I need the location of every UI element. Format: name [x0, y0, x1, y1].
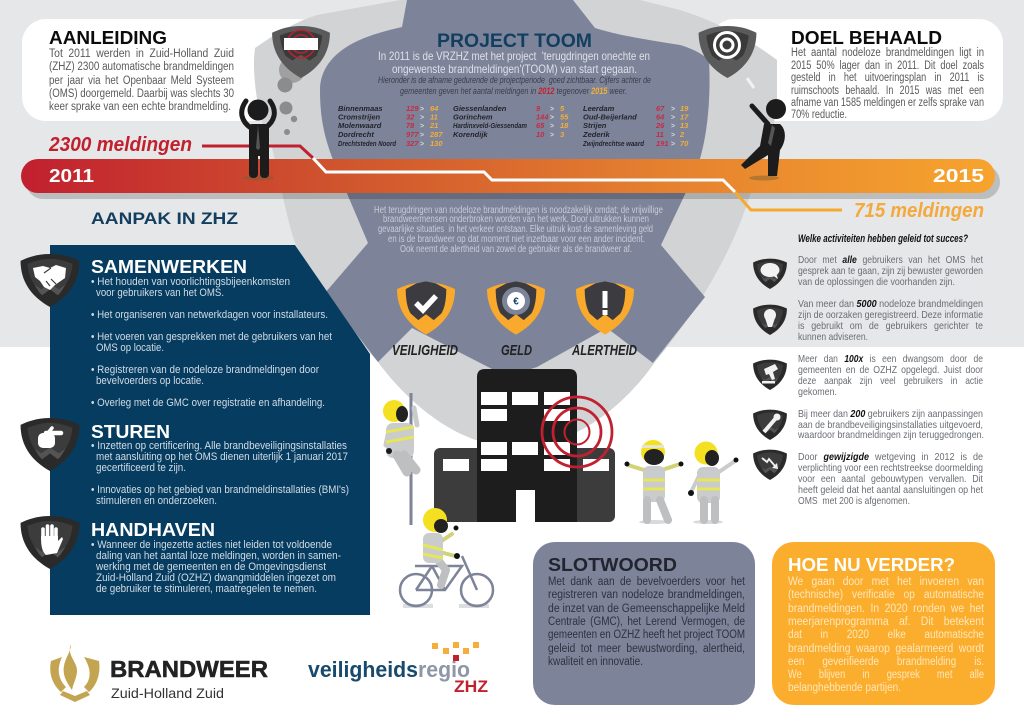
- text block: activiteit 5: voor een aantal gebouwtypen vervallen. Dit: [798, 473, 983, 485]
- timeline connector line: [202, 146, 842, 210]
- panel: hoe nu verder: We blijven in gesprek met alle: [788, 669, 984, 681]
- panel: slotwoord: de inzet van de Gemeenschappelijke Meld: [548, 603, 745, 615]
- table: meldingen per gemeente: 191: [656, 139, 669, 148]
- table: meldingen per gemeente: 18: [560, 121, 569, 130]
- table: meldingen per gemeente: 67: [656, 104, 665, 113]
- table: meldingen per gemeente: 9: [536, 104, 541, 113]
- icon: handshake shield: [21, 254, 79, 307]
- text block: waarom noodzakelijk: gevaarlijke situaties in het verkeer ontstaan. Elke uitruk kost de samenleving geld: [378, 224, 653, 235]
- table: meldingen per gemeente: 26: [655, 121, 665, 130]
- text block: samenwerken: • Overleg met de GMC over registratie en afhandeling.: [91, 397, 325, 409]
- illustration: firefighter waving: [688, 442, 738, 524]
- table: meldingen per gemeente: >: [671, 114, 675, 122]
- text block: activiteit 2: Van meer dan 5000 nodeloze brandmeldingen: [798, 298, 983, 310]
- table: meldingen per gemeente: 144: [536, 112, 549, 122]
- text block: activiteit 1: [798, 254, 983, 288]
- text block: activiteit 2: [798, 298, 983, 343]
- table: meldingen per gemeente: 10: [536, 130, 545, 139]
- text block: activiteit 2: is gebruikt om de gebruikers gerichter te: [798, 320, 983, 332]
- table: meldingen per gemeente: Leerdam: [583, 104, 615, 113]
- logo: brandweer zuid-holland zuid: Zuid-Holland Zuid: [111, 685, 224, 701]
- text block: handhaven: • Wanneer de ingezette acties niet leiden tot voldoende: [91, 539, 332, 551]
- label: geld: GELD: [501, 342, 532, 359]
- table: meldingen per gemeente: [338, 104, 689, 148]
- timeline bar: 2015: [933, 165, 984, 186]
- text block: waarom noodzakelijk: Het terugdringen van nodeloze brandmeldingen is noodzakelijk omdat; de vrijwillige: [374, 205, 663, 216]
- table: meldingen per gemeente: Cromstrijen: [338, 112, 381, 122]
- heading: aanpak in zhz: AANPAK IN ZHZ: [91, 209, 238, 228]
- timeline bar: [21, 159, 1000, 199]
- table: meldingen per gemeente: >: [420, 114, 424, 122]
- table: meldingen per gemeente: 130: [430, 139, 443, 148]
- text block: activiteit 4: waardoor brandmeldingen zijn teruggedrongen.: [797, 429, 984, 441]
- table: meldingen per gemeente: 13: [680, 121, 689, 130]
- card: aanleiding background: [22, 19, 322, 121]
- text block: samenwerken: • Het houden van voorlichtingsbijeenkomsten: [91, 276, 290, 288]
- text block: activiteit 5: verplichting voor een rechtstreekse doormelding: [798, 462, 983, 474]
- icon: pointing hand shield: [21, 418, 79, 471]
- table: meldingen per gemeente: 287: [429, 130, 443, 139]
- panel: slotwoord: geleid tot meer bewustwording, alertheid,: [548, 643, 745, 655]
- panel: hoe nu verder: HOE NU VERDER?: [788, 554, 955, 575]
- text block: activiteit 4: aan de brandbeveiligingsinstallaties uitgevoerd,: [798, 419, 983, 431]
- heading: 2300 meldingen: 2300 meldingen: [48, 134, 192, 156]
- table: meldingen per gemeente: 78: [406, 121, 415, 130]
- text block: aanleiding: AANLEIDING: [49, 27, 167, 48]
- text block: doel behaald: 70% reductie.: [791, 109, 847, 121]
- text block: doel behaald: Het aantal nodeloze brandmeldingen ligt in: [791, 47, 984, 59]
- panel: hoe nu verder: meerjarenprogramma af. Dit betekent: [788, 616, 985, 628]
- table: meldingen per gemeente: Strijen: [583, 121, 607, 130]
- logo: brandweer zuid-holland zuid: [50, 644, 268, 702]
- text block: activiteit 4: Bij meer dan 200 gebruikers zijn aanpassingen: [798, 408, 983, 420]
- text block: activiteit 1: van de oplossingen die voorhanden zijn.: [798, 276, 955, 288]
- panel: aanpak: [50, 245, 370, 615]
- text block: doel behaald: [791, 27, 984, 121]
- text block: activiteit 5: OMS met 200 is afgenomen.: [798, 495, 910, 507]
- text block: sturen: • Inzetten op certificering. Alle brandbeveiligingsinstallaties: [91, 440, 347, 452]
- text block: handhaven: Zuid-Holland Zuid (OZHZ) dwangmiddelen ingezet om: [96, 572, 336, 584]
- text block: waarom noodzakelijk: Ook neemt de alertheid van zowel de gebruiker als de brandweer af.: [400, 244, 632, 255]
- text block: aanleiding: keer sprake van een echte brandmelding.: [49, 101, 231, 113]
- panel: hoe nu verder: brandmelding waarop gealarmeerd wordt: [788, 643, 985, 655]
- table: meldingen per gemeente: 11: [430, 112, 438, 122]
- table: meldingen per gemeente: >: [420, 132, 424, 139]
- text block: activiteit 3: gekomen.: [798, 386, 837, 398]
- illustration: target shield: [699, 26, 756, 88]
- panel: slotwoord: gemeenten en OZHZ heeft het project TOOM: [548, 629, 745, 641]
- table: meldingen per gemeente: 55: [560, 112, 569, 122]
- illustration: worried person 2011: [242, 100, 274, 180]
- timeline bar: 2011: [49, 165, 94, 186]
- text block: handhaven: daling van het aantal loze meldingen, worden in samen-: [96, 550, 341, 562]
- panel: hoe nu verder: dat in 2020 elke automatische: [788, 629, 984, 641]
- table: meldingen per gemeente: >: [550, 123, 554, 130]
- illustration: cheering person 2015: [741, 99, 786, 180]
- text block: samenwerken: [91, 257, 332, 409]
- heading: 715 meldingen: 715 meldingen: [854, 200, 984, 222]
- table: meldingen per gemeente: >: [671, 123, 675, 130]
- table: meldingen per gemeente: 977: [406, 130, 419, 139]
- text block: activiteit 3: gemeenten en de OZHZ opgelegd. Juist door: [798, 364, 983, 376]
- logo: brandweer zuid-holland zuid: BRANDWEER: [110, 656, 268, 682]
- table: meldingen per gemeente: 64: [430, 104, 439, 113]
- text block: handhaven: de gebruiker te stimuleren, maatregelen te nemen.: [96, 583, 317, 595]
- text block: activiteit 2: zijn de oorzaken geregistreerd. Deze informatie: [798, 309, 983, 321]
- table: meldingen per gemeente: Korendijk: [453, 130, 488, 139]
- icon: veiligheid shield: [397, 281, 455, 335]
- text block: aanleiding: per jaar via het Openbaar Meld Systeem: [49, 75, 234, 87]
- panel: hoe nu verder: belanghebbende partijen.: [788, 682, 901, 694]
- table: meldingen per gemeente: 17: [680, 112, 689, 122]
- table: meldingen per gemeente: 21: [429, 121, 438, 130]
- central blue-grey shape: [320, 0, 710, 372]
- table: meldingen per gemeente: >: [671, 141, 675, 148]
- logo: veiligheidsregio zhz: [308, 642, 488, 696]
- table: meldingen per gemeente: 65: [536, 121, 545, 130]
- text block: activiteit 3: [798, 353, 983, 398]
- table: meldingen per gemeente: Oud-Beijerland: [583, 112, 637, 122]
- table: meldingen per gemeente: Gorinchem: [453, 112, 493, 122]
- text block: samenwerken: bevelvoerders op locatie.: [96, 375, 204, 387]
- grey rays from shields to building: [378, 328, 653, 447]
- table: meldingen per gemeente: 32: [406, 112, 415, 122]
- icon: light bulb shield: [753, 305, 787, 335]
- text block: waarom noodzakelijk: en is de brandweer op dat moment niet inzetbaar voor een ander incident.: [388, 234, 645, 245]
- background: upper grey band: [0, 0, 1024, 347]
- label: veiligheid: VEILIGHEID: [392, 342, 458, 359]
- text block: handhaven: werking met de gemeenten en de Omgevingsdienst: [95, 561, 326, 573]
- text block: activiteit 3: deze aanpak zijn veel gebruikers in actie: [798, 375, 983, 387]
- icon: gavel shield: [753, 360, 787, 390]
- table: meldingen per gemeente: >: [671, 106, 675, 113]
- table: meldingen per gemeente: Zwijndrechtse waard: [582, 139, 644, 148]
- panel: hoe nu verder: (technische) verificatie op automatische: [788, 589, 984, 601]
- illustration: building with alarm rings: [434, 369, 615, 522]
- table: meldingen per gemeente: 2: [679, 130, 685, 139]
- text block: activiteit 1: gesprek aan te gaan, zijn zij bewuster geworden: [798, 265, 983, 277]
- table: meldingen per gemeente: >: [420, 106, 424, 113]
- panel: hoe nu verder: We gaan door met het invoeren van: [788, 576, 984, 588]
- table: meldingen per gemeente: 19: [680, 104, 689, 113]
- text block: activiteit 5: heeft geleid dat het aantal aansluitingen op het: [798, 484, 983, 496]
- icon: geld shield: [487, 281, 545, 335]
- text block: handhaven: [91, 520, 341, 595]
- text block: handhaven: HANDHAVEN: [91, 520, 215, 540]
- table: meldingen per gemeente: 3: [560, 130, 565, 139]
- text block: aanleiding: (OMS) doorgemeld. Daarbij was slechts 30: [49, 88, 234, 100]
- text block: aanleiding: [49, 27, 234, 113]
- table: meldingen per gemeente: Giessenlanden: [453, 104, 507, 113]
- panel: slotwoord: SLOTWOORD: [548, 554, 677, 575]
- table: meldingen per gemeente: Hardinxveld-Giessendam: [453, 121, 527, 130]
- illustration: thought shield and bubbles: [272, 26, 330, 135]
- table: meldingen per gemeente: 5: [560, 104, 565, 113]
- table: meldingen per gemeente: 129: [406, 104, 419, 113]
- text block: samenwerken: • Het organiseren van netwerkdagen voor installateurs.: [91, 309, 328, 321]
- table: meldingen per gemeente: Drechtsteden Noord: [338, 139, 396, 148]
- text block: activiteit 5: Door gewijzigde wetgeving in 2012 is de: [798, 451, 983, 463]
- table: meldingen per gemeente: >: [550, 114, 554, 122]
- central grey shield shape: [254, 0, 777, 447]
- panel: slotwoord: [533, 542, 755, 705]
- icon: stop hand shield: [21, 516, 79, 569]
- logo: veiligheidsregio zhz: ZHZ: [454, 677, 488, 696]
- table: meldingen per gemeente: Zederik: [582, 130, 611, 139]
- table: meldingen per gemeente: Binnenmaas: [338, 104, 383, 113]
- text block: waarom noodzakelijk: brandweermensen onderbroken worden van het werk. Door uitrukken kunnen: [383, 214, 649, 225]
- panel: hoe nu verder: [772, 542, 995, 705]
- panel: hoe nu verder: brandmeldingen. In 2020 ronden we het: [788, 603, 985, 615]
- text block: sturen: STUREN: [91, 422, 170, 442]
- text block: samenwerken: SAMENWERKEN: [91, 257, 247, 277]
- table: meldingen per gemeente: 64: [656, 112, 665, 122]
- text block: sturen: • Innovaties op het gebied van brandmeldinstallaties (BMI's): [91, 484, 349, 496]
- text block: activiteit 2: kunnen adviseren.: [798, 331, 868, 343]
- text block: aanleiding: (ZHZ) 2300 automatische brandmeldingen: [49, 61, 234, 73]
- text block: project toom: [378, 30, 651, 97]
- panel: slotwoord: Centrale (GMC), het Lerend Vermogen, de: [548, 616, 745, 628]
- panel: slotwoord: kwaliteit en innovatie.: [548, 656, 643, 668]
- text block: samenwerken: • Het voeren van gesprekken met de gebruikers van het: [91, 331, 332, 343]
- illustration: firefighter on bicycle: [400, 508, 493, 608]
- text block: sturen: gecertificeerd te zijn.: [96, 462, 186, 474]
- panel: slotwoord: Met dank aan de bevelvoerders voor het: [548, 576, 746, 588]
- text block: waarom noodzakelijk: [374, 205, 663, 255]
- illustration: firefighter on pole: [383, 393, 417, 525]
- table: meldingen per gemeente: >: [550, 132, 554, 139]
- text block: aanleiding: Tot 2011 werden in Zuid-Holland Zuid: [49, 48, 234, 60]
- text block: project toom: PROJECT TOOM: [437, 30, 592, 52]
- panel: slotwoord: registreren van nodeloze brandmeldingen,: [548, 589, 745, 601]
- table: meldingen per gemeente: 327: [406, 139, 419, 148]
- text block: activiteit 4: [797, 408, 984, 441]
- text block: project toom: In 2011 is de VRZHZ met het project 'terugdringen onechte en: [378, 49, 650, 63]
- logo: veiligheidsregio zhz: veiligheidsregio: [308, 657, 470, 682]
- table: meldingen per gemeente: >: [550, 106, 554, 113]
- text block: samenwerken: OMS op locatie.: [96, 342, 164, 354]
- icon: speech bubble shield: [753, 259, 787, 289]
- text block: sturen: met aansluiting op het OMS dienen uiterlijk 1 januari 2017: [96, 451, 348, 463]
- illustration: firefighter with raised arms: [624, 440, 684, 524]
- text block: sturen: [91, 422, 349, 507]
- icon: alertheid shield: [576, 281, 634, 335]
- icon: falling arrow shield: [753, 450, 787, 480]
- table: meldingen per gemeente: Molenwaard: [338, 121, 382, 130]
- text block: project toom: Hieronder is de afname gedurende de projectperiode goed zichtbaar. Cijfers achter de: [378, 75, 651, 86]
- text block: activiteit 1: Door met alle gebruikers van het OMS het: [798, 254, 983, 266]
- table: meldingen per gemeente: >: [420, 141, 424, 148]
- text block: sturen: stimuleren en onderzoeken.: [96, 495, 217, 507]
- table: meldingen per gemeente: >: [671, 132, 675, 139]
- icon: wrench shield: [753, 410, 787, 440]
- card: doel behaald background: [710, 19, 1003, 121]
- table: meldingen per gemeente: 11: [656, 130, 664, 139]
- text block: samenwerken: • Registreren van de nodeloze brandmeldingen door: [91, 364, 319, 376]
- icon: geld shield: €: [513, 296, 519, 308]
- panel: hoe nu verder: een geverifieerde brandmelding is.: [788, 656, 984, 668]
- text block: project toom: gemeenten geven het aantal meldingen in 2012 tegenover 2015 weer.: [400, 86, 627, 97]
- label: alertheid: ALERTHEID: [571, 342, 637, 359]
- table: meldingen per gemeente: Dordrecht: [338, 130, 374, 139]
- text block: project toom: ongewenste brandmeldingen'(TOOM) van start gegaan.: [392, 62, 637, 76]
- text block: activiteit 3: Meer dan 100x is een dwangsom door de: [798, 353, 983, 365]
- text block: activiteit 5: [798, 451, 983, 507]
- text block: samenwerken: voor gebruikers van het OMS.: [96, 287, 224, 299]
- table: meldingen per gemeente: >: [420, 123, 424, 130]
- table: meldingen per gemeente: 70: [680, 139, 689, 148]
- text block: doel behaald: DOEL BEHAALD: [791, 27, 942, 48]
